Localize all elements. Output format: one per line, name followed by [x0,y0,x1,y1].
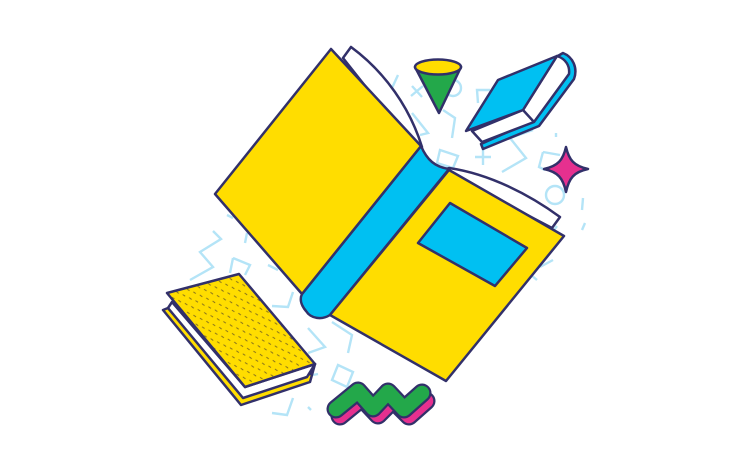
blue book [466,53,575,149]
cone [415,60,461,113]
front cover [466,56,557,131]
small patterned book [163,274,315,405]
open book [215,47,564,381]
back cover [481,53,575,149]
corner fold [523,110,534,122]
right page edge [440,168,560,228]
star [544,147,588,192]
patterned front cover [167,274,315,387]
background confetti marks [190,75,585,415]
zigzag [336,391,426,416]
right cover [330,170,564,381]
back cover [163,308,315,405]
left cover [215,49,421,294]
pages [472,56,569,142]
pages [168,302,315,398]
cover label [418,203,527,286]
left page edge [343,47,422,147]
spine [301,146,449,318]
